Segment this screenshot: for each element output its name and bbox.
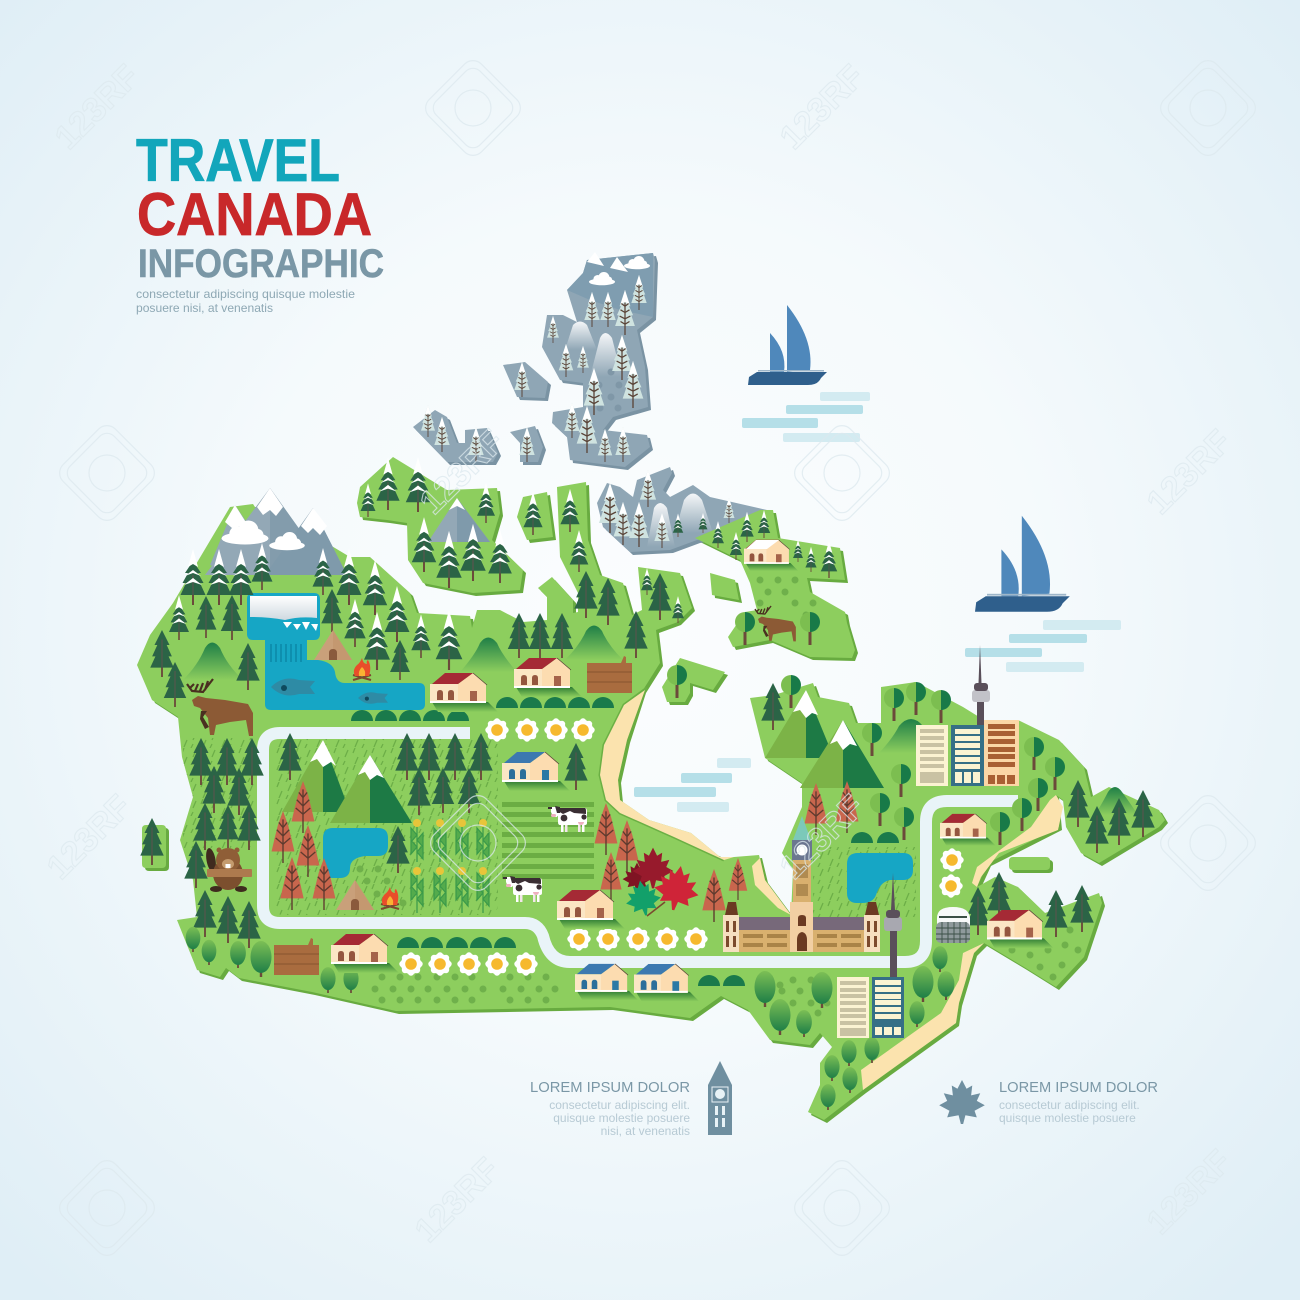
cows	[503, 806, 587, 902]
land extrusion shadow	[140, 460, 1168, 1123]
left wing	[739, 917, 790, 952]
moose north	[755, 606, 796, 641]
western snowy mountains	[205, 488, 347, 575]
icon: fish	[271, 679, 315, 695]
callout body: consectetur adipiscing elit.	[999, 1098, 1140, 1112]
small northern grey mountain	[428, 498, 490, 542]
tower south	[884, 873, 902, 977]
flowers	[399, 718, 964, 976]
green mountains centre	[282, 740, 412, 823]
right wing	[813, 917, 864, 952]
icon: small fish	[358, 692, 388, 704]
callout heading: LOREM IPSUM DOLOR	[530, 1079, 690, 1096]
orange tower	[984, 720, 1019, 786]
icon: clock tower	[708, 1061, 732, 1135]
callout body	[999, 1098, 1140, 1125]
green hills	[183, 626, 1138, 815]
round trees	[667, 612, 1065, 845]
callout heading: LOREM IPSUM DOLOR	[999, 1079, 1158, 1096]
callout body: quisque molestie posuere	[553, 1111, 690, 1125]
beige tower	[916, 725, 948, 786]
panel: map of Canada	[137, 252, 1168, 1123]
subtitle text: posuere nisi, at venenatis	[136, 301, 273, 315]
heading: infographic: INFOGRAPHIC	[138, 242, 384, 286]
greenhouse dome	[936, 907, 970, 943]
buildings south	[837, 873, 904, 1038]
icon: maple leaf	[939, 1080, 985, 1124]
title block	[136, 127, 384, 315]
bushes	[351, 697, 899, 986]
parliament building	[723, 816, 880, 952]
beaches	[600, 688, 1063, 1090]
callout body: consectetur adipiscing elit.	[549, 1098, 690, 1112]
subtitle text: consectetur adipiscing quisque molestie	[136, 287, 355, 301]
dots	[356, 576, 1082, 1016]
grass areas	[183, 737, 916, 917]
lake east	[847, 853, 913, 903]
icon: sailboat north	[748, 305, 827, 385]
snowy pines	[169, 457, 837, 670]
sea stripes	[634, 392, 1121, 812]
wooden crates	[274, 656, 632, 975]
grey arctic islands	[413, 252, 770, 555]
icy trees	[421, 275, 734, 548]
lake centre	[323, 828, 388, 878]
buildings north east	[916, 645, 1019, 786]
clock tower	[790, 816, 813, 952]
callout body	[549, 1098, 690, 1138]
heading: canada: CANADA	[137, 181, 372, 248]
callout body: quisque molestie posuere	[999, 1111, 1136, 1125]
green land	[137, 457, 1165, 1120]
road	[263, 733, 1018, 962]
beige tower south	[837, 977, 869, 1038]
blue tower	[951, 725, 984, 786]
beaver	[204, 847, 252, 892]
striped field	[502, 802, 594, 879]
oval trees	[186, 927, 954, 1110]
callout body: nisi, at venenatis	[601, 1124, 690, 1138]
right tower	[864, 902, 880, 952]
callout: left lorem ipsum	[530, 1079, 690, 1138]
icon: sailboat east	[975, 516, 1070, 612]
tepees and campfires	[314, 630, 399, 910]
blue tower south	[872, 977, 904, 1038]
corn field	[411, 819, 489, 913]
moose west	[187, 679, 253, 736]
houses	[331, 540, 1054, 1001]
left tower	[723, 902, 739, 952]
red pines	[272, 781, 858, 922]
callout: right lorem ipsum	[999, 1079, 1158, 1125]
CN tower	[972, 645, 990, 730]
heading: travel: TRAVEL	[136, 127, 340, 194]
maple leaves	[623, 848, 703, 918]
green mountains east	[765, 690, 884, 788]
dark pines	[140, 571, 1155, 948]
waterfall and river	[247, 593, 425, 710]
subtitle text	[136, 287, 355, 315]
